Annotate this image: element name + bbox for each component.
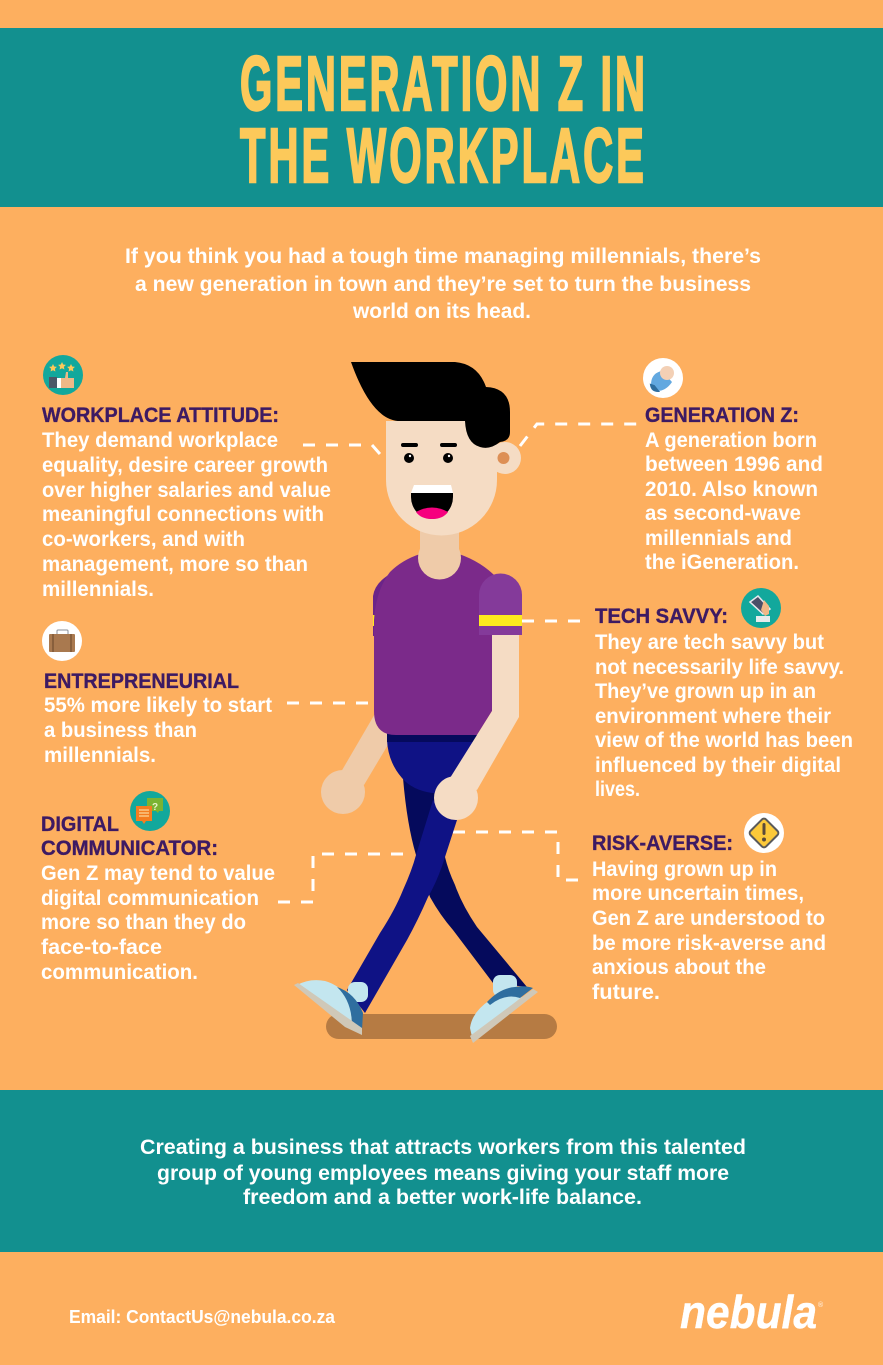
connector: entrepreneurial (287, 702, 368, 704)
hair (351, 362, 510, 448)
icon: chat bubbles: ? (152, 802, 158, 813)
heading: TECH SAVVY: (595, 604, 728, 628)
body text: meaningful connections with (42, 503, 324, 526)
connector: generation z (520, 424, 640, 446)
body text (592, 858, 826, 1004)
icon: thumbs up with stars (43, 355, 83, 395)
body text: 2010. Also known (645, 478, 818, 501)
body text (42, 429, 331, 601)
body text: a business than (44, 719, 197, 742)
neck (418, 525, 461, 580)
body text: co-workers, and with (42, 528, 245, 551)
body text: digital communication (41, 887, 259, 910)
closing text: Creating a business that attracts workers from this talented (140, 1136, 746, 1159)
body text: millennials. (42, 578, 154, 601)
front shoe (294, 980, 368, 1035)
connector: risk-averse (453, 832, 580, 880)
logo: nebula: ® (818, 1301, 824, 1309)
panel: tech savvy (595, 588, 853, 801)
body text: between 1996 and (645, 453, 823, 476)
body text (41, 862, 275, 984)
body text (44, 694, 272, 767)
body text: the iGeneration. (645, 551, 799, 574)
body text: more so than they do (41, 911, 246, 934)
logo: nebula: nebula (680, 1286, 817, 1338)
face (386, 421, 497, 536)
intro text (125, 245, 761, 323)
heading (41, 812, 218, 860)
connector: attitude (303, 445, 387, 462)
closing text: freedom and a better work-life balance. (243, 1186, 642, 1209)
body text: as second-wave (645, 502, 801, 525)
ear (489, 442, 521, 474)
character illustration (294, 362, 557, 1043)
title (240, 42, 645, 199)
icon: baby (643, 358, 683, 398)
back arm (321, 712, 392, 814)
heading: ENTREPRENEURIAL (44, 669, 239, 693)
body text (645, 429, 823, 574)
intro text: world on its head. (352, 300, 531, 323)
header band (0, 28, 883, 207)
closing text: group of young employees means giving your staff more (157, 1162, 729, 1185)
body text: 55% more likely to start (44, 694, 272, 717)
back sleeve (373, 573, 392, 636)
body text: They’ve grown up in an (595, 680, 816, 703)
contact email: Email: ContactUs@nebula.co.za (69, 1307, 336, 1327)
closing text (140, 1136, 746, 1209)
intro text: If you think you had a tough time managing millennials, there’s (125, 245, 761, 268)
front leg (347, 800, 457, 1013)
body text: more uncertain times, (592, 882, 804, 905)
heading: WORKPLACE ATTITUDE: (42, 403, 279, 427)
body text: view of the world has been (595, 729, 853, 752)
body text: communication. (41, 961, 198, 984)
body text: They demand workplace (42, 429, 278, 452)
body text: They are tech savvy but (595, 631, 824, 654)
body text: not necessarily life savvy. (595, 656, 844, 679)
eyes (404, 453, 453, 463)
panel: entrepreneurial (42, 621, 272, 767)
body text: millennials and (645, 527, 792, 550)
back leg (403, 778, 527, 987)
body text: future. (592, 981, 660, 1004)
heading: COMMUNICATOR: (41, 836, 218, 860)
intro text: a new generation in town and they’re set to turn the business (135, 273, 751, 296)
closing band (0, 1090, 883, 1252)
icon: briefcase (42, 621, 82, 661)
icon: warning sign (744, 813, 784, 853)
ground shadow (326, 1014, 557, 1039)
body text: environment where their (595, 705, 831, 728)
body text: lives. (595, 778, 640, 801)
panel: generation z (643, 358, 823, 574)
body text: A generation born (645, 429, 817, 452)
heading: GENERATION Z: (645, 403, 799, 427)
body text: anxious about the (592, 956, 766, 979)
mouth (411, 485, 453, 519)
front arm (434, 635, 519, 820)
connector: digital communicator (278, 854, 404, 902)
hips and belt (387, 732, 477, 793)
body text: management, more so than (42, 553, 308, 576)
body text: Gen Z are understood to (592, 907, 825, 930)
body text: Gen Z may tend to value (41, 862, 275, 885)
icon: chat bubbles (130, 791, 170, 831)
body text (595, 631, 853, 801)
body text: influenced by their digital (595, 754, 841, 777)
torso shirt (374, 554, 497, 735)
body text: face-to-face (41, 936, 162, 959)
connector: tech savvy (522, 620, 590, 622)
panel: workplace attitude (42, 355, 331, 601)
body text: millennials. (44, 744, 156, 767)
heading: RISK-AVERSE: (592, 831, 733, 855)
title: THE WORKPLACE (240, 114, 644, 199)
front sleeve (479, 574, 522, 635)
panel: digital communicator (41, 791, 275, 984)
body text: equality, desire career growth (42, 454, 328, 477)
body text: be more risk-averse and (592, 932, 826, 955)
heading: DIGITAL (41, 812, 119, 836)
title: GENERATION Z IN (240, 42, 645, 127)
body text: over higher salaries and value (42, 479, 331, 502)
body text: Having grown up in (592, 858, 777, 881)
eyebrows (403, 443, 455, 447)
panel: risk-averse (592, 813, 826, 1004)
icon: hand holding phone (741, 588, 781, 628)
back shoe (470, 975, 538, 1043)
